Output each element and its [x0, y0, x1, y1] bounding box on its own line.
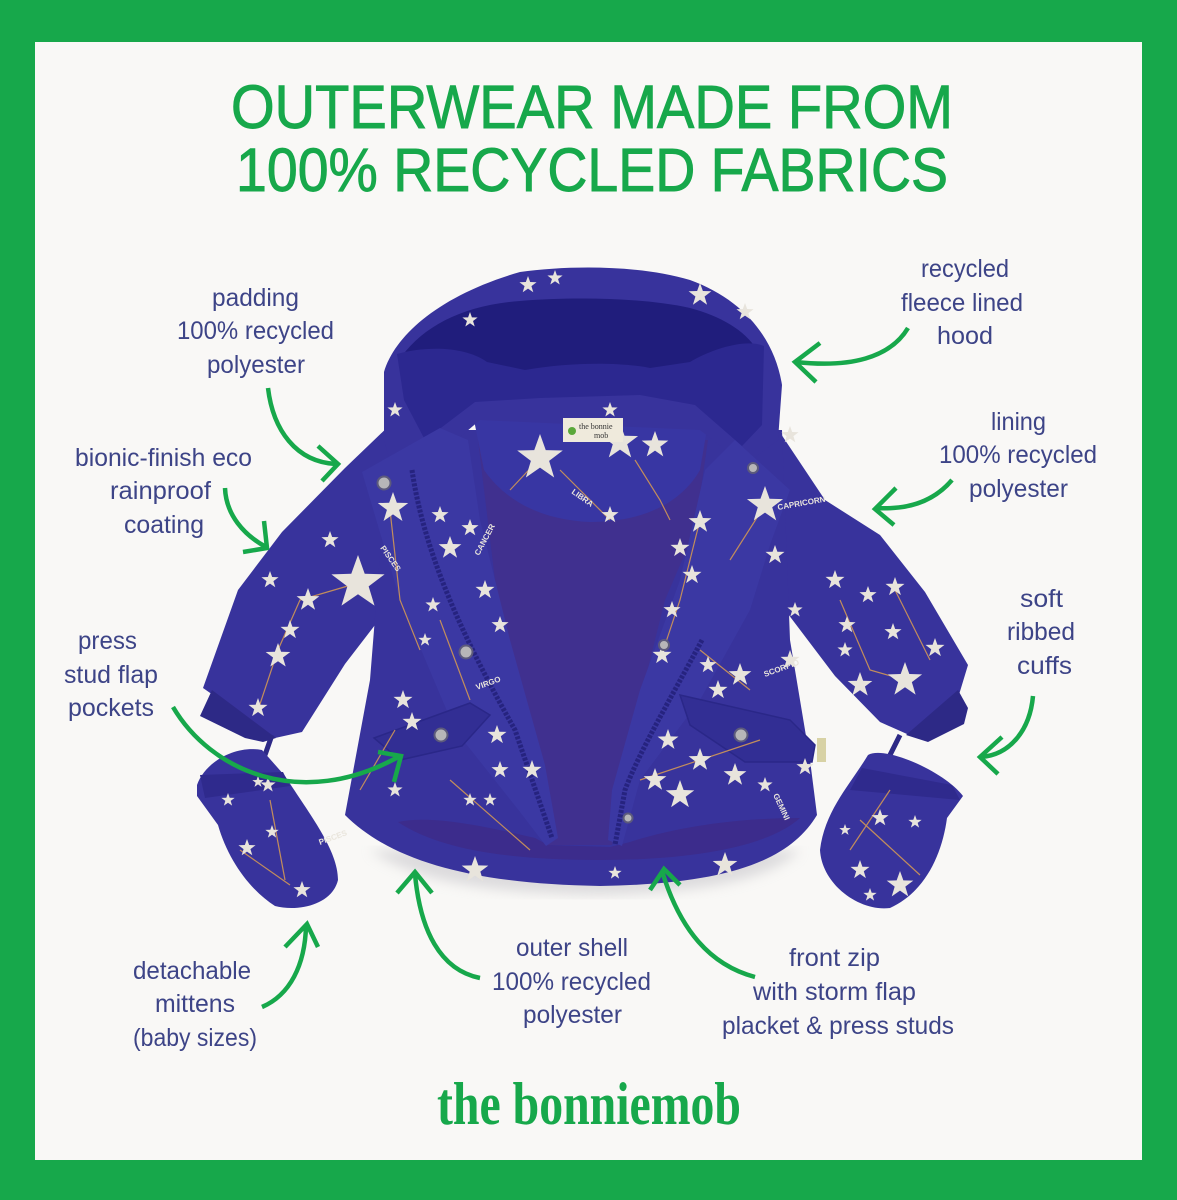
label: outer shell: 100% recycled — [492, 968, 651, 996]
label: padding: polyester — [207, 351, 305, 379]
neck label: mob — [594, 431, 608, 440]
constellation names: PISCES — [318, 828, 349, 847]
arrow: hood — [795, 328, 908, 382]
label: pockets — [64, 627, 158, 722]
label: outer shell — [492, 934, 651, 1029]
label: fleece lined hood: fleece lined — [901, 289, 1023, 317]
left mitten gather — [200, 772, 290, 798]
jacket body — [345, 430, 817, 886]
label: cuffs — [1007, 585, 1075, 680]
arrow: cuffs — [980, 696, 1033, 774]
brand logo: the bonniemob — [437, 1071, 741, 1137]
label: fleece lined hood: hood — [937, 322, 993, 350]
title: 100% RECYCLED FABRICS — [236, 136, 948, 204]
hood fleece lining — [402, 299, 757, 378]
label: lining: 100% recycled — [939, 441, 1097, 469]
label: cuffs: soft — [1020, 585, 1063, 613]
label: cuffs: cuffs — [1017, 652, 1072, 680]
constellation names: VIRGO — [475, 675, 502, 692]
constellation names: PISCES — [378, 544, 403, 574]
constellation names — [318, 487, 826, 847]
title — [231, 73, 953, 204]
constellation lines — [240, 458, 930, 885]
label: front zip: front zip — [789, 944, 880, 972]
arrow: outer shell — [397, 872, 480, 978]
constellation names: LIBRA — [570, 487, 595, 509]
zippers — [412, 470, 702, 845]
label: cuffs: ribbed — [1007, 618, 1075, 646]
label: padding: padding — [212, 284, 299, 312]
label: mittens — [133, 957, 257, 1052]
label: fleece lined hood: recycled — [921, 255, 1009, 283]
jacket shadow — [370, 850, 800, 895]
label: front zip: placket & press studs — [722, 1012, 954, 1040]
left sleeve — [203, 420, 420, 738]
label: rainproof coating: coating — [124, 511, 204, 539]
left mitten — [197, 749, 338, 908]
left cuff — [200, 690, 276, 742]
label: padding — [177, 284, 334, 379]
arrow: lining — [875, 480, 952, 525]
label: pockets: stud flap — [64, 661, 158, 689]
arrow: front zip — [650, 869, 755, 977]
label: rainproof coating: bionic-finish eco — [75, 444, 252, 472]
arrow: mittens — [262, 924, 318, 1007]
mitten straps — [265, 735, 900, 755]
label: front zip: with storm flap — [752, 978, 916, 1006]
arrow: padding — [268, 388, 338, 481]
left placket — [362, 428, 558, 846]
label: lining: lining — [991, 408, 1046, 436]
label: mittens: mittens — [155, 990, 235, 1018]
label: pockets: press — [78, 627, 137, 655]
label: rainproof coating: rainproof — [110, 477, 211, 505]
constellation names: SCORPIO — [763, 658, 800, 679]
press studs — [378, 463, 758, 822]
neck label: the bonnie — [579, 422, 613, 431]
right sleeve — [745, 425, 968, 738]
hood shell — [384, 267, 782, 490]
neck label — [563, 418, 623, 442]
label: front zip — [722, 944, 954, 1040]
label: outer shell: outer shell — [516, 934, 628, 962]
right mitten — [820, 753, 963, 908]
label: padding: 100% recycled — [177, 317, 334, 345]
label: mittens: detachable — [133, 957, 251, 985]
label: lining: polyester — [969, 475, 1068, 503]
jacket illustration — [197, 267, 968, 908]
label: lining — [939, 408, 1097, 503]
constellation names: GEMINI — [771, 792, 791, 822]
label: pockets: pockets — [68, 694, 154, 722]
label: rainproof coating — [75, 444, 252, 539]
label: outer shell: polyester — [523, 1001, 622, 1029]
title: OUTERWEAR MADE FROM — [231, 73, 953, 141]
arrow: pockets — [173, 707, 401, 782]
back yoke — [470, 400, 712, 522]
star print — [221, 270, 945, 901]
label: mittens: (baby sizes) — [133, 1024, 257, 1052]
right mitten gather — [850, 768, 960, 800]
right cuff — [906, 690, 968, 742]
constellation names: CANCER — [473, 522, 497, 557]
hem lining — [398, 818, 800, 860]
inner lining — [478, 440, 708, 845]
pockets — [374, 695, 815, 762]
fleece collar — [397, 343, 764, 446]
constellation names: CAPRICORN — [777, 495, 826, 512]
arrow: rainproof coating — [225, 488, 267, 552]
pocket tab — [817, 738, 826, 762]
right placket — [608, 440, 790, 846]
label: fleece lined hood — [901, 255, 1023, 350]
